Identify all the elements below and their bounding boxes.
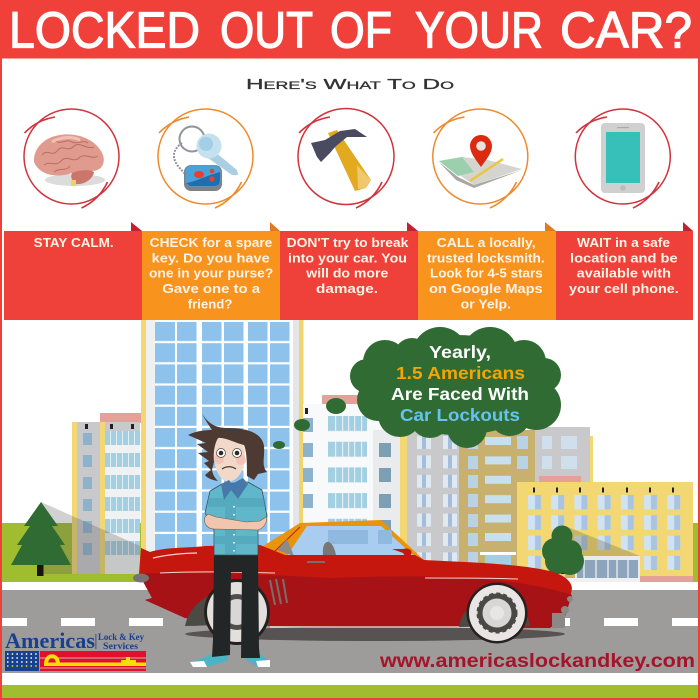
callout: cloud with statistic: Car Lockouts — [400, 405, 520, 425]
building: gray and tan blocks — [400, 427, 593, 568]
icon: hammer in circle — [298, 108, 394, 208]
panel: call a locksmith: CALL a locally, — [437, 235, 536, 250]
logo: Americas Lock & Key Services: Lock & Key — [98, 632, 144, 642]
neck and face — [214, 436, 245, 482]
panel: wait in a safe location: your cell phone. — [569, 281, 679, 296]
panel: call a locksmith — [418, 222, 556, 320]
title banner: OUT — [220, 2, 313, 58]
ground and road — [2, 523, 698, 698]
panel: call a locksmith: or Yelp. — [461, 296, 511, 311]
panel: call a locksmith: Look for 4-5 stars — [430, 266, 543, 281]
panel: wait in a safe location — [556, 222, 693, 320]
forearms — [205, 514, 267, 530]
panel: don't try to break in: damage. — [316, 281, 378, 296]
shirt — [205, 482, 267, 555]
buttons — [233, 506, 235, 552]
logo: Americas Lock & Key Services — [5, 628, 146, 671]
icon: map pin in circle — [433, 109, 528, 208]
building: white mid block — [303, 395, 400, 580]
building: left block — [72, 413, 141, 574]
hair — [188, 413, 267, 481]
panel: don't try to break in: DON'T try to break — [287, 235, 409, 250]
panel: wait in a safe location: available with — [577, 266, 671, 281]
callout: cloud with statistic: Are Faced With — [391, 384, 529, 404]
panel: check for a spare key: CHECK for a spare — [150, 235, 272, 250]
website url: www.americaslockandkey.com — [379, 651, 695, 672]
panel: wait in a safe location: location and be — [570, 250, 678, 265]
icon: phone in circle — [575, 109, 670, 208]
panel: stay calm — [4, 222, 142, 320]
panel: check for a spare key: key. Do you have — [152, 250, 270, 265]
title banner: OF — [330, 2, 392, 58]
title banner: LOCKED — [9, 2, 200, 58]
car — [133, 520, 573, 645]
panel: check for a spare key: Gave one to a — [162, 281, 261, 296]
logo: Americas Lock & Key Services: Americas — [5, 628, 95, 653]
title banner: YOUR — [415, 2, 543, 58]
panel: wait in a safe location: WAIT in a safe — [577, 235, 670, 250]
collar — [221, 478, 248, 500]
title banner: CAR? — [560, 2, 692, 58]
callout: cloud with statistic: Yearly, — [429, 342, 491, 362]
panel: check for a spare key: one in your purse? — [149, 266, 273, 281]
panel: check for a spare key — [142, 222, 280, 320]
building: tall glass tower — [141, 320, 304, 560]
callout: cloud with statistic — [350, 327, 561, 448]
shoes — [190, 654, 270, 667]
trousers — [212, 554, 260, 658]
panel: call a locksmith: on Google Maps — [429, 281, 543, 296]
panel: don't try to break in: into your car. You — [288, 250, 407, 265]
callout: cloud with statistic: 1.5 Americans — [396, 363, 525, 383]
panel: don't try to break in — [280, 222, 418, 320]
panel: check for a spare key: friend? — [188, 296, 232, 311]
subtitle: Here's What To Do — [246, 76, 455, 93]
panel: stay calm: STAY CALM. — [34, 235, 114, 250]
thought bubbles — [273, 398, 346, 449]
panel: call a locksmith: trusted locksmith. — [427, 250, 545, 265]
icon: keys in circle — [158, 109, 253, 208]
panel: don't try to break in: will do more — [305, 266, 388, 281]
logo: Americas Lock & Key Services: Services — [103, 641, 139, 651]
title banner — [0, 0, 700, 58]
building: yellow block — [517, 482, 693, 582]
character: worried man with crossed arms — [188, 413, 270, 667]
shirt plaid — [208, 484, 266, 555]
icon: brain in circle — [24, 109, 119, 208]
tree: round tree — [542, 526, 584, 575]
tree: left conifer with shadow — [11, 502, 140, 576]
